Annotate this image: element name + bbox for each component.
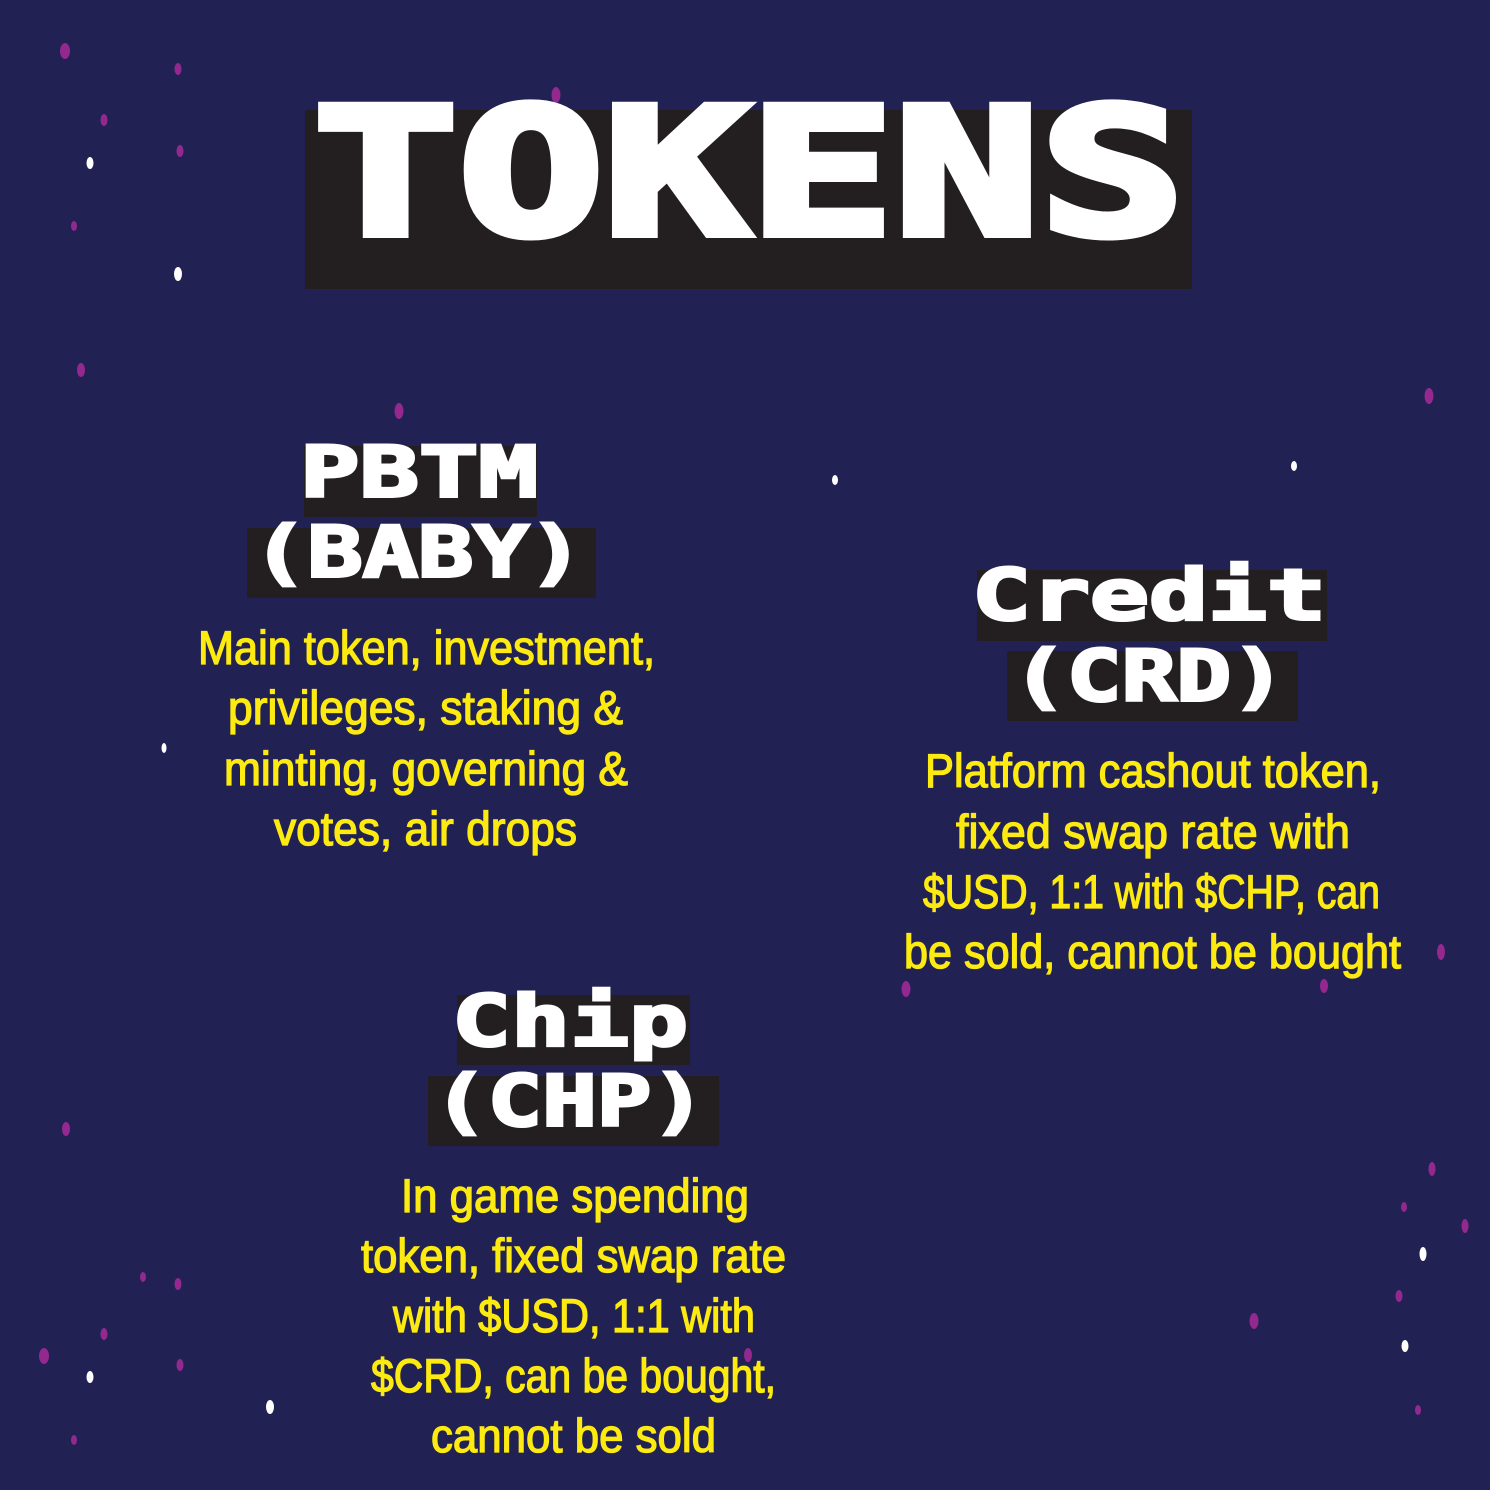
description: PBTM: privileges, staking &	[228, 681, 623, 734]
description: Chip	[361, 1169, 786, 1462]
description: PBTM: minting, governing &	[224, 742, 628, 795]
description: Chip: with $USD, 1:1 with	[392, 1289, 755, 1342]
title: TOKENS	[313, 71, 1185, 276]
heading: PBTM (BABY): (BABY)	[252, 512, 584, 594]
heading: Chip (CHP): Chip	[452, 980, 688, 1062]
heading: PBTM (BABY)	[247, 432, 596, 598]
panel: Chip token	[361, 980, 786, 1462]
description: Chip: $CRD, can be bought,	[371, 1349, 776, 1402]
heading: Credit (CRD): Credit	[972, 554, 1326, 636]
heading: PBTM (BABY): PBTM	[300, 432, 538, 514]
title	[305, 71, 1192, 289]
description: Credit: fixed swap rate with	[956, 805, 1350, 858]
description: PBTM: votes, air drops	[274, 802, 577, 855]
description: Chip: In game spending	[401, 1169, 749, 1222]
description: Credit	[904, 744, 1401, 978]
description: Chip: cannot be sold	[431, 1409, 716, 1462]
panel: Credit token	[904, 554, 1401, 978]
heading: Chip (CHP)	[428, 980, 719, 1146]
description: PBTM	[198, 621, 655, 855]
panel: PBTM token	[198, 432, 655, 855]
heading: Chip (CHP): (CHP)	[433, 1060, 706, 1142]
heading: Credit (CRD): (CRD)	[1012, 636, 1286, 718]
description: Credit: Platform cashout token,	[925, 744, 1381, 797]
description: Credit: $USD, 1:1 with $CHP, can	[923, 865, 1380, 918]
description: Credit: be sold, cannot be bought	[904, 925, 1401, 978]
starfield: white stars	[86, 157, 1426, 1414]
description: PBTM: Main token, investment,	[198, 621, 655, 674]
description: Chip: token, fixed swap rate	[361, 1229, 786, 1282]
heading: Credit (CRD)	[972, 554, 1327, 721]
